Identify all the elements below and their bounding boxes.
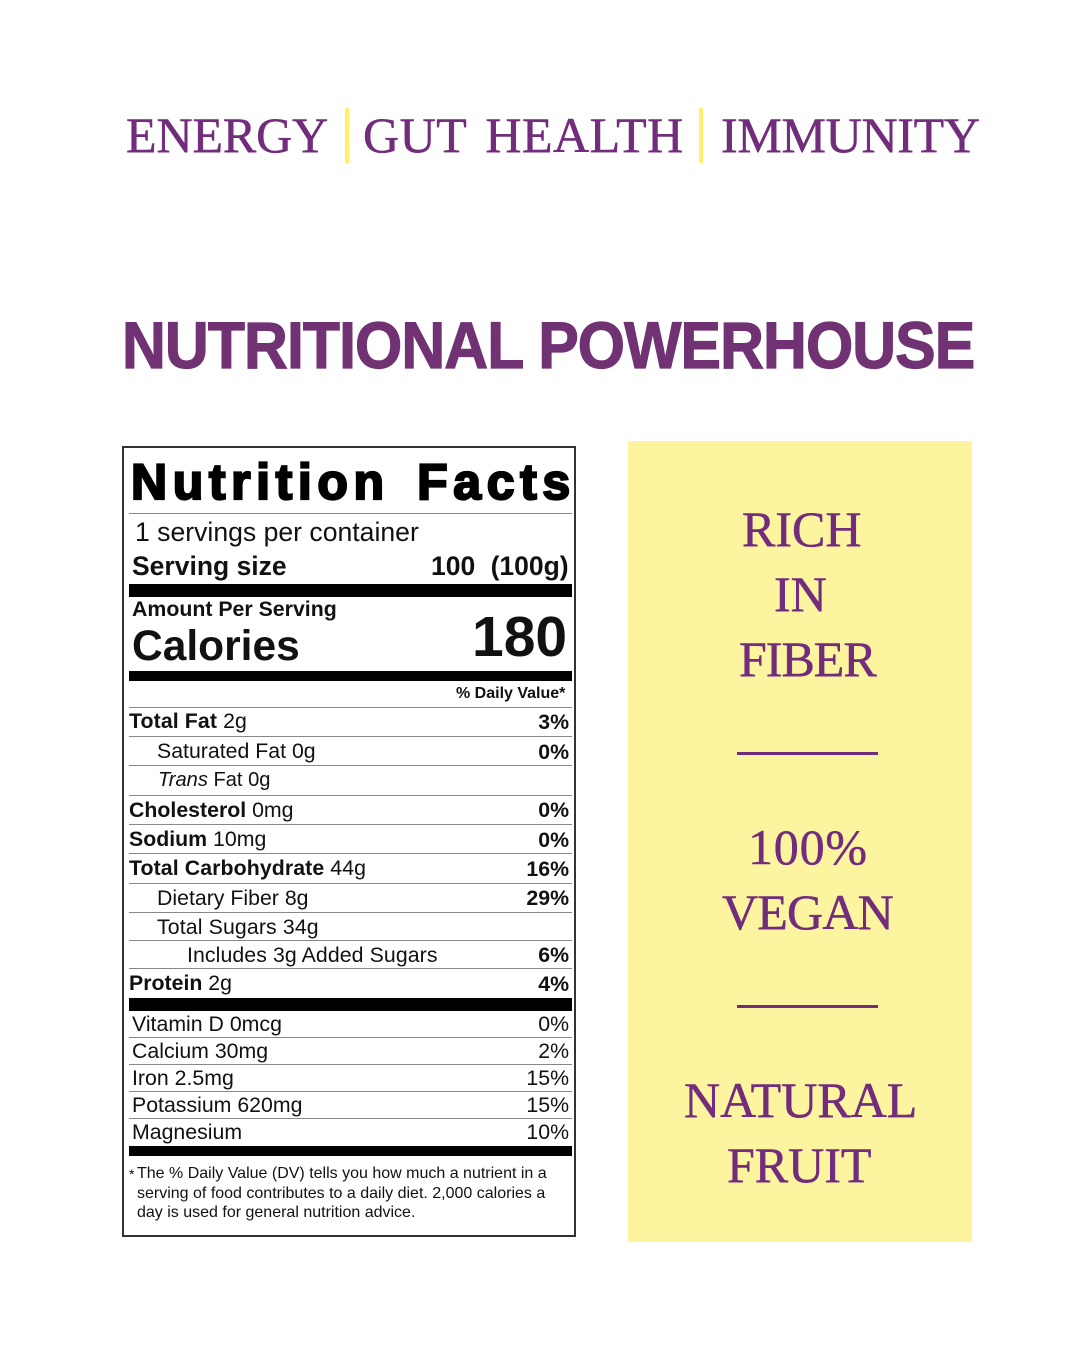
row: potassium: 15% — [526, 1093, 569, 1117]
row: vitamin d: Vitamin D 0mcg — [132, 1012, 282, 1036]
row: potassium — [132, 1093, 569, 1117]
row: added sugars: 6% — [538, 943, 569, 967]
highlight: rich in fiber: IN — [774, 566, 827, 622]
row: iron: 15% — [526, 1066, 569, 1090]
calories: Calories — [132, 623, 300, 670]
panel: yellow highlights — [628, 441, 972, 1242]
highlight: natural fruit: NATURAL — [684, 1072, 917, 1128]
nutrition facts contents — [129, 454, 576, 1221]
row: total carbohydrate: Total Carbohydrate 44g — [129, 856, 366, 880]
row: protein: Protein 2g — [129, 971, 232, 995]
row: dietary fiber — [157, 886, 569, 910]
calories value: 180 — [472, 605, 567, 669]
highlight: rich in fiber: RICH — [742, 501, 861, 557]
highlight: rich in fiber — [739, 501, 877, 687]
highlight: natural fruit: FRUIT — [727, 1137, 871, 1193]
servings per container: 1 servings per container — [135, 517, 419, 547]
row: iron: Iron 2.5mg — [132, 1066, 234, 1090]
footnote — [129, 1165, 547, 1221]
benefit: energy: ENERGY — [126, 107, 328, 163]
benefit: immunity: IMMUNITY — [721, 107, 980, 163]
row: saturated fat: Saturated Fat 0g — [157, 739, 316, 763]
row: total fat: 3% — [538, 710, 569, 734]
row: protein: 4% — [538, 972, 569, 996]
row: magnesium — [132, 1120, 569, 1144]
footnote: serving of food contributes to a daily diet. 2,000 calories a — [137, 1185, 545, 1202]
row: vitamin d — [132, 1012, 569, 1036]
row: trans fat: Trans Fat 0g — [158, 769, 270, 791]
row: protein — [129, 971, 569, 996]
serving size value: 100 (100g) — [431, 551, 569, 581]
top banner: benefits — [126, 107, 980, 163]
row: calcium — [132, 1039, 569, 1063]
serving size: Serving size — [132, 551, 287, 581]
highlight: 100% vegan: VEGAN — [722, 884, 893, 940]
row: cholesterol: Cholesterol 0mg — [129, 798, 294, 822]
row: total carbohydrate — [129, 856, 569, 881]
row: cholesterol — [129, 798, 569, 822]
row: cholesterol: 0% — [538, 798, 569, 822]
row: total sugars: Total Sugars 34g — [157, 915, 319, 939]
highlight: rich in fiber: FIBER — [739, 631, 876, 687]
benefit: gut health: GUT HEALTH — [363, 107, 684, 163]
row: total carbohydrate: 16% — [526, 857, 569, 881]
row: total fat: Total Fat 2g — [129, 709, 247, 733]
row: total fat — [129, 709, 569, 734]
row: calcium: Calcium 30mg — [132, 1039, 268, 1063]
row: saturated fat: 0% — [538, 740, 569, 764]
row: vitamin d: 0% — [538, 1012, 569, 1036]
row: dietary fiber: 29% — [526, 886, 569, 910]
row: sodium: Sodium 10mg — [129, 827, 266, 851]
row: saturated fat — [157, 739, 569, 764]
row: added sugars: Includes 3g Added Sugars — [187, 943, 438, 967]
highlight: natural fruit — [684, 1072, 917, 1193]
row: potassium: Potassium 620mg — [132, 1093, 302, 1117]
row: magnesium: 10% — [526, 1120, 569, 1144]
row: added sugars — [187, 943, 569, 967]
panel: nutrition facts label — [122, 446, 576, 1237]
row: iron — [132, 1066, 569, 1090]
footnote: day is used for general nutrition advice. — [137, 1204, 415, 1221]
row: calcium: 2% — [538, 1039, 569, 1063]
row: magnesium: Magnesium — [132, 1120, 242, 1144]
footnote: The % Daily Value (DV) tells you how much a nutrient in a — [137, 1165, 547, 1182]
title: NUTRITIONAL POWERHOUSE — [122, 308, 974, 382]
row: dietary fiber: Dietary Fiber 8g — [157, 886, 309, 910]
daily value header: % Daily Value* — [456, 685, 565, 702]
highlight: 100% vegan: 100% — [748, 819, 868, 875]
row: sodium — [129, 827, 569, 852]
amount per serving: Amount Per Serving — [132, 597, 337, 621]
highlight: 100% vegan — [722, 819, 893, 940]
heading: nutrition facts: Nutrition Facts — [131, 454, 576, 510]
row: sodium: 0% — [538, 828, 569, 852]
footnote: * — [129, 1166, 134, 1182]
